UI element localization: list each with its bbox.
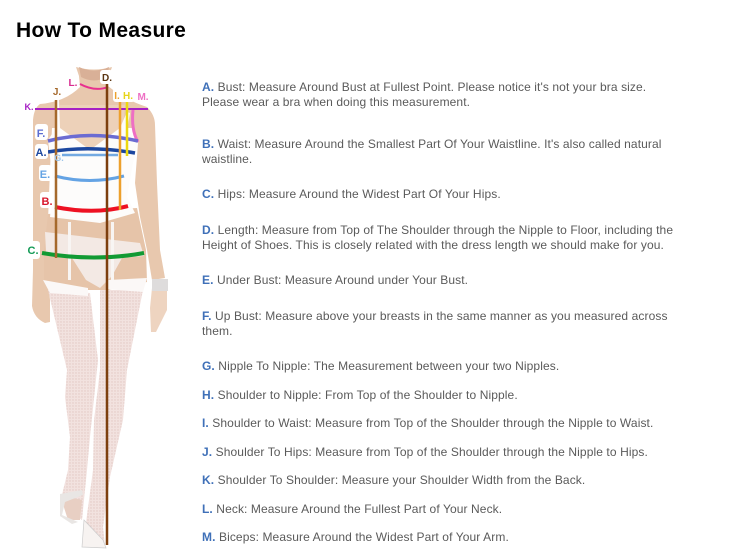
mesh stockings — [48, 290, 98, 520]
feet and sandals — [60, 495, 82, 520]
text: C Hips: C. Hips: Measure Around the Widest Part Of Your Hips. — [202, 187, 501, 201]
text: H Shoulder to Nipple: H. Shoulder to Nipple: From Top of the Shoulder to Nipple. — [202, 388, 518, 402]
corset — [48, 100, 138, 223]
text: F Up Bust — [202, 309, 668, 338]
text: A Bust: A. Bust: Measure Around Bust at Fullest Point. Please notice it's not your bra size. — [202, 80, 646, 94]
right hand and bracelet — [150, 288, 167, 332]
measurement letter labels: G. — [54, 153, 64, 163]
text: B Waist: waistline. — [202, 152, 252, 166]
lace underwear and garters — [45, 232, 144, 288]
model body — [32, 67, 168, 548]
text: M Biceps: M. Biceps: Measure Around the Widest Part of Your Arm. — [202, 530, 509, 544]
text: I Shoulder to Waist: I. Shoulder to Waist: Measure from Top of the Shoulder through the Nipple to Waist. — [202, 416, 653, 430]
measurement letter labels: C. — [28, 245, 38, 257]
measurement letter labels: I. — [114, 91, 120, 102]
measurement letter labels: D. — [102, 73, 112, 84]
skin: face, neck, shoulders, upper arms and hips — [32, 67, 165, 323]
measurement letter labels: L. — [69, 78, 78, 89]
text: A Bust: Please wear a bra when doing this measurement. — [202, 95, 470, 109]
measurement letter labels: J. — [53, 87, 61, 98]
stocking bands — [43, 280, 88, 296]
text: F Up Bust: F. Up Bust: Measure above your breasts in the same manner as you measured across — [202, 309, 668, 323]
measurement letter labels: H. — [123, 91, 133, 102]
text: E Under Bust: E. Under Bust: Measure Around under Your Bust. — [202, 273, 468, 287]
text: D Length: D. Length: Measure from Top of The Shoulder through the Nipple to Floor, including the — [202, 223, 673, 237]
text: G Nipple To Nipple: G. Nipple To Nipple: The Measurement between your two Nipples. — [202, 359, 559, 373]
text: K Shoulder To Shoulder: K. Shoulder To Shoulder: Measure your Shoulder Width from the Back. — [202, 473, 585, 487]
text: D Length: Height of Shoes. This is closely related with the dress length we should make for you. — [202, 238, 664, 252]
text: B Waist: B. Waist: Measure Around the Smallest Part Of Your Waistline. It's also called natural — [202, 137, 662, 151]
measurement letter labels: B. — [42, 196, 52, 208]
measurement letter labels: K. — [24, 102, 34, 112]
text: L Neck: L. Neck: Measure Around the Fullest Part of Your Neck. — [202, 502, 502, 516]
text: A Bust — [202, 80, 646, 109]
text: J Shoulder To Hips: J. Shoulder To Hips: Measure from Top of the Shoulder through the Nipple to Hips. — [202, 445, 648, 459]
measurement letter labels — [24, 73, 149, 257]
text: F Up Bust: them. — [202, 324, 233, 338]
measurement letter labels: M. — [137, 92, 149, 103]
text: D Length — [202, 223, 673, 252]
measurement letter labels: E. — [40, 169, 50, 181]
title: How To Measure — [16, 19, 186, 42]
label halos — [27, 70, 135, 259]
measurement lines — [35, 84, 148, 545]
measurement letter labels: A. — [36, 147, 46, 159]
measurement letter labels: F. — [37, 128, 45, 140]
figure: model with measurement lines — [24, 67, 168, 548]
text: B Waist — [202, 137, 662, 166]
